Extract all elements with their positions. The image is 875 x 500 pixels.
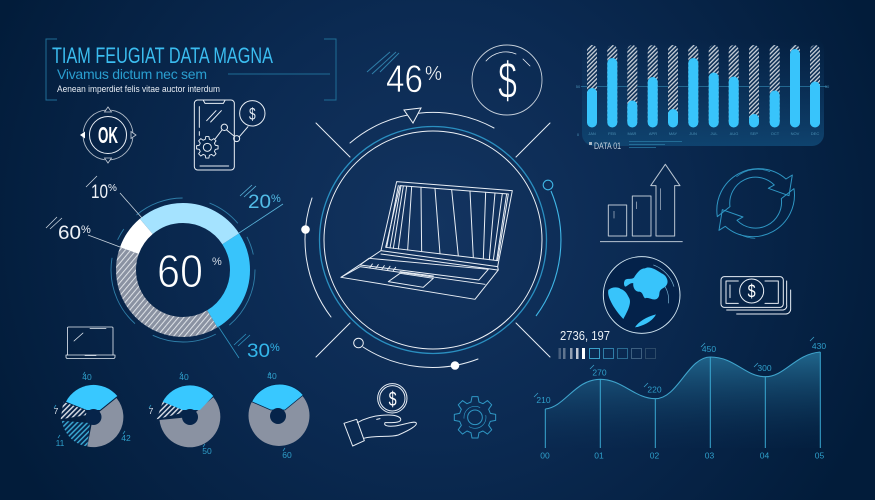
icon: small laptop xyxy=(66,327,115,358)
icon: banknotes: $ xyxy=(748,281,756,302)
percent label: 46% xyxy=(367,52,442,101)
callout: 30% xyxy=(218,326,280,362)
central dial with laptop xyxy=(301,108,561,370)
axis labels: 05 xyxy=(815,450,824,460)
pie chart 2: 7 xyxy=(149,406,154,416)
title block: TIAM FEUGIAT DATA MAGNA xyxy=(52,43,273,68)
callout: 10% xyxy=(86,176,142,218)
month labels: NOV xyxy=(791,131,800,136)
axis labels: 00 xyxy=(540,450,550,460)
counter: 2736, 197: 2736, 197 xyxy=(560,328,610,343)
icon: banknotes xyxy=(721,277,791,314)
icon: OK dial xyxy=(80,107,136,163)
donut chart xyxy=(46,176,283,362)
callout: 10%: % xyxy=(108,183,117,194)
bar chart panel xyxy=(576,38,830,151)
icon: OK dial: OK xyxy=(98,122,118,148)
icon: hand holding coin: $ xyxy=(389,388,397,411)
value labels: 430 xyxy=(812,341,826,351)
area line chart xyxy=(534,337,826,460)
callout: 60% xyxy=(46,217,120,247)
hatched bar tracks xyxy=(587,45,820,127)
title block: Aenean imperdiet felis vitae auctor interdum xyxy=(57,84,220,95)
pie chart 1: 7 xyxy=(54,406,59,416)
pie chart 2 xyxy=(149,372,220,456)
icon: cycle arrows xyxy=(717,169,794,238)
icon: phone with gear and dollar: $ xyxy=(249,104,256,123)
month labels: AUG xyxy=(730,131,738,136)
title block xyxy=(46,39,336,100)
axis labels: 01 xyxy=(594,450,604,460)
callout: 60%: 60 xyxy=(58,223,81,244)
percent label: 46%: % xyxy=(425,63,442,85)
value labels: 220 xyxy=(647,384,662,394)
legend: data 01: DATA 01 xyxy=(594,141,621,151)
counter: 2736, 197 xyxy=(558,328,656,359)
callout: 10%: 10 xyxy=(91,182,108,203)
bottom arc with ring and dot xyxy=(354,338,478,370)
month labels: MAR xyxy=(628,131,637,136)
axis labels: 02 xyxy=(650,450,659,460)
value labels: 450 xyxy=(702,344,716,354)
progress squares xyxy=(590,348,656,358)
donut center value: % xyxy=(212,256,222,268)
icon: central laptop xyxy=(341,182,512,299)
arc with triangle pointer xyxy=(350,108,494,143)
month labels: JUL xyxy=(710,131,718,136)
pie chart 2: 50 xyxy=(202,446,212,456)
month labels: 0 xyxy=(577,132,580,137)
legend: data 01 xyxy=(589,141,682,151)
callout: 60%: % xyxy=(81,224,91,236)
icon: globe xyxy=(603,257,680,333)
pie chart 3: 60 xyxy=(282,450,292,460)
pie chart 2: 40 xyxy=(179,372,189,382)
month labels: 50 xyxy=(576,84,581,89)
progress strips xyxy=(558,348,585,359)
value labels: 300 xyxy=(757,363,772,373)
callout: 20% xyxy=(239,185,283,233)
pie chart 3 xyxy=(248,371,310,460)
pie chart 1: 11 xyxy=(56,438,65,448)
icon: hand holding coin xyxy=(344,384,416,446)
month labels: SEP xyxy=(750,131,758,136)
percent label: 46%: 46 xyxy=(386,58,423,101)
value labels: 270 xyxy=(592,368,607,378)
icon: gear xyxy=(454,397,496,438)
icon: dollar coin xyxy=(472,45,542,115)
month labels: MAY xyxy=(669,131,678,136)
axis labels: 03 xyxy=(705,450,714,460)
callout: 30%: % xyxy=(270,342,280,354)
title block: Vivamus dictum nec sem xyxy=(57,66,207,82)
icon: growth bars with arrow xyxy=(600,164,683,242)
callout: 20%: % xyxy=(271,193,281,205)
pie chart 1: 42 xyxy=(121,433,131,443)
month labels: JUN xyxy=(689,131,697,136)
left arc with dot xyxy=(301,198,331,317)
month labels: DEC xyxy=(811,131,819,136)
right arc with ring xyxy=(536,180,561,316)
month labels: APR xyxy=(649,131,657,136)
pie chart 1: 40 xyxy=(82,372,92,382)
callout: 20%: 20 xyxy=(248,192,271,213)
icon: phone with gear and dollar xyxy=(194,100,265,170)
value labels xyxy=(534,337,826,405)
month labels: 50 xyxy=(825,84,830,89)
value labels: 210 xyxy=(536,395,551,405)
pie chart 1 xyxy=(54,372,131,448)
callout: 30%: 30 xyxy=(247,341,270,362)
axis labels xyxy=(540,450,824,460)
donut center value: 60 xyxy=(157,245,203,297)
blue bars xyxy=(587,49,820,128)
month labels: OCT xyxy=(771,131,780,136)
axis labels: 04 xyxy=(760,450,769,460)
pie chart 3: 40 xyxy=(267,371,277,381)
month labels: FEB xyxy=(608,131,616,136)
month labels: JAN xyxy=(588,131,596,136)
icon: dollar coin: $ xyxy=(498,52,517,110)
month labels xyxy=(576,84,830,137)
